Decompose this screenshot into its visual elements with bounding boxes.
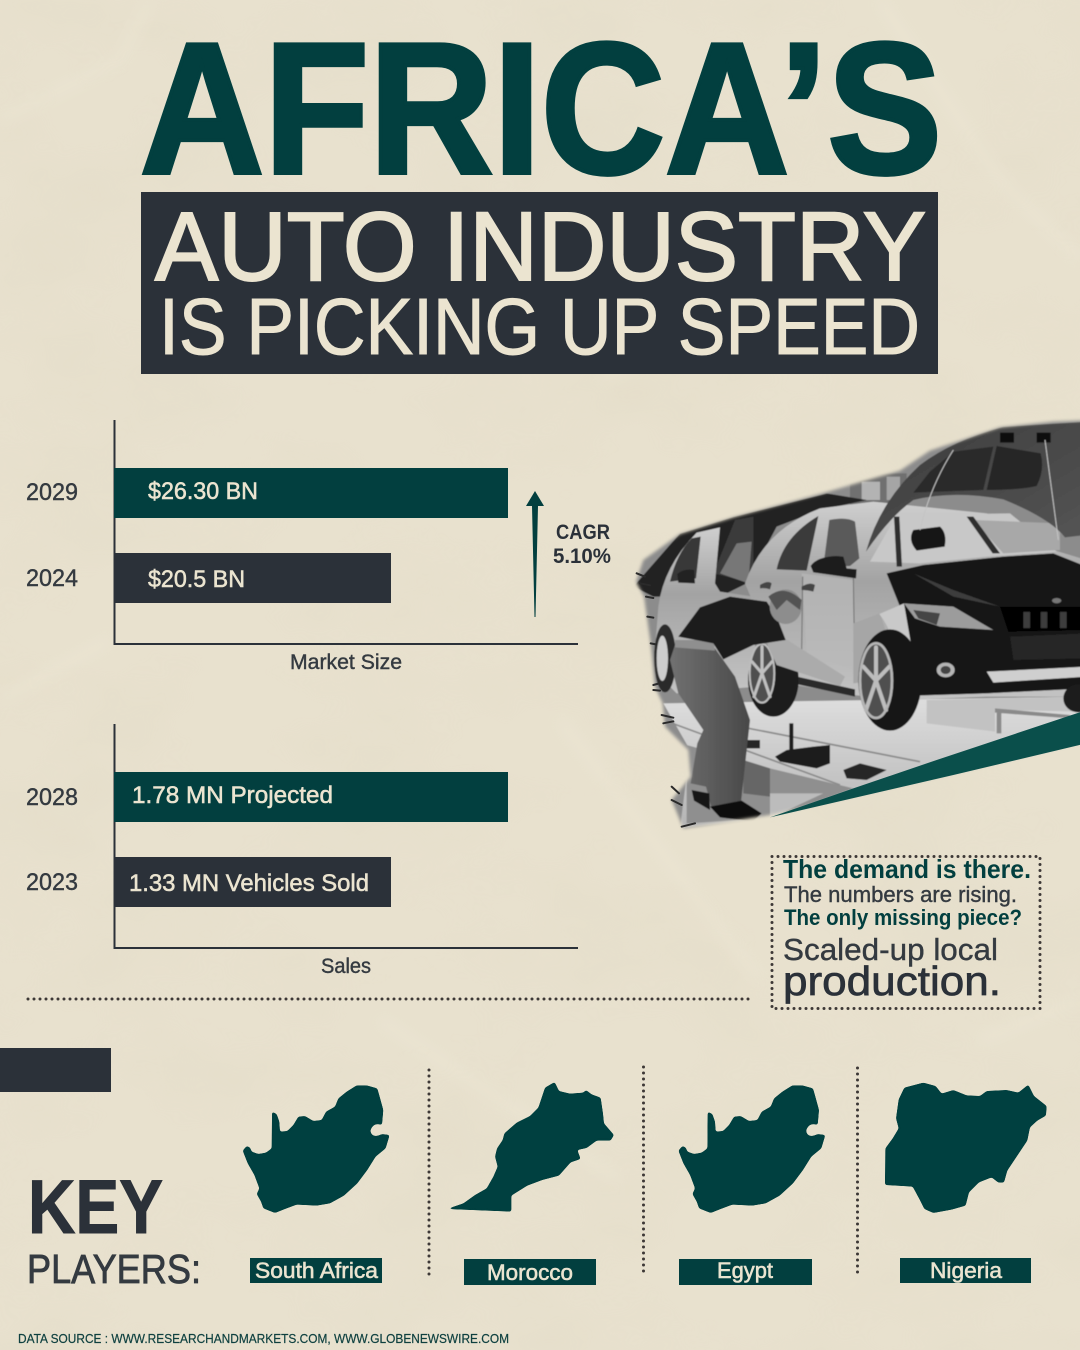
chart: sales (26, 724, 578, 978)
footer: data source: DATA SOURCE : WWW.RESEARCHANDMARKETS.COM, WWW.GLOBENEWSWIRE.COM (18, 1332, 509, 1346)
title: AFRICA’S (140, 4, 942, 213)
torn edge marks (637, 573, 695, 827)
hood (866, 422, 1080, 552)
axis label: sales: Sales (321, 955, 371, 978)
bar: 2028 sales: 1.78 MN Projected (132, 782, 333, 809)
title banner: IS PICKING UP SPEED (159, 282, 920, 371)
player: Morocco (447, 1082, 614, 1285)
bar: 2023 sales (26, 857, 391, 907)
player: Egypt: Egypt (717, 1258, 774, 1283)
green torn band (770, 710, 1080, 817)
callout: scaled-up local production: The demand is there. (783, 854, 1031, 884)
heading: key players (27, 1165, 201, 1292)
worker (670, 645, 750, 808)
CAGR label (553, 521, 611, 568)
engine bay and front fascia (887, 553, 1080, 696)
title banner (141, 192, 938, 374)
player: Morocco: Morocco (487, 1260, 573, 1285)
bar: 2024 market size: 2024 (26, 565, 78, 592)
heading: key players: KEY (28, 1165, 163, 1250)
bar: 2023 sales: 1.33 MN Vehicles Sold (129, 870, 369, 897)
callout: scaled-up local production (772, 854, 1040, 1008)
jack and tools (789, 723, 793, 752)
bar: 2029 market size: 2029 (26, 479, 78, 506)
main car body (745, 502, 1080, 700)
decorative block (0, 1048, 111, 1092)
bar: 2029 market size: $26.30 BN (148, 478, 258, 505)
CAGR label: 5.10% (553, 545, 611, 568)
CAGR label: CAGR (556, 521, 610, 544)
player: South Africa: South Africa (255, 1258, 378, 1283)
chart: market size (26, 420, 578, 674)
windshield (870, 513, 1057, 563)
bar: 2028 sales: 2028 (26, 784, 78, 811)
fender and arch (853, 623, 884, 684)
bar: 2024 market size (26, 553, 391, 603)
axis label: market size: Market Size (290, 651, 402, 674)
player: Nigeria: Nigeria (930, 1258, 1002, 1283)
platform base (687, 745, 853, 823)
title banner: AUTO INDUSTRY (155, 192, 926, 301)
side mirror (811, 556, 857, 578)
photo: worker checking a car on assembly line (620, 410, 1080, 843)
bar: 2023 sales: 2023 (26, 869, 78, 896)
callout: scaled-up local production: The only missing piece? (784, 905, 1022, 930)
player: Egypt (678, 1085, 825, 1285)
divider: dotted line (28, 998, 750, 1000)
callout: scaled-up local production: Scaled-up local (783, 932, 998, 967)
player: South Africa (243, 1085, 390, 1283)
wheels (858, 629, 922, 731)
callout: scaled-up local production: production. (783, 958, 1001, 1004)
bar: 2029 market size (26, 468, 508, 518)
floor (663, 697, 1080, 828)
bar: 2024 market size: $20.5 BN (148, 566, 245, 593)
arrow: CAGR (526, 491, 544, 617)
left car (655, 527, 757, 693)
callout: scaled-up local production: The numbers are rising. (784, 882, 1017, 907)
bar: 2028 sales (26, 772, 508, 822)
player: Nigeria (885, 1083, 1047, 1283)
heading: key players: PLAYERS: (27, 1246, 201, 1292)
